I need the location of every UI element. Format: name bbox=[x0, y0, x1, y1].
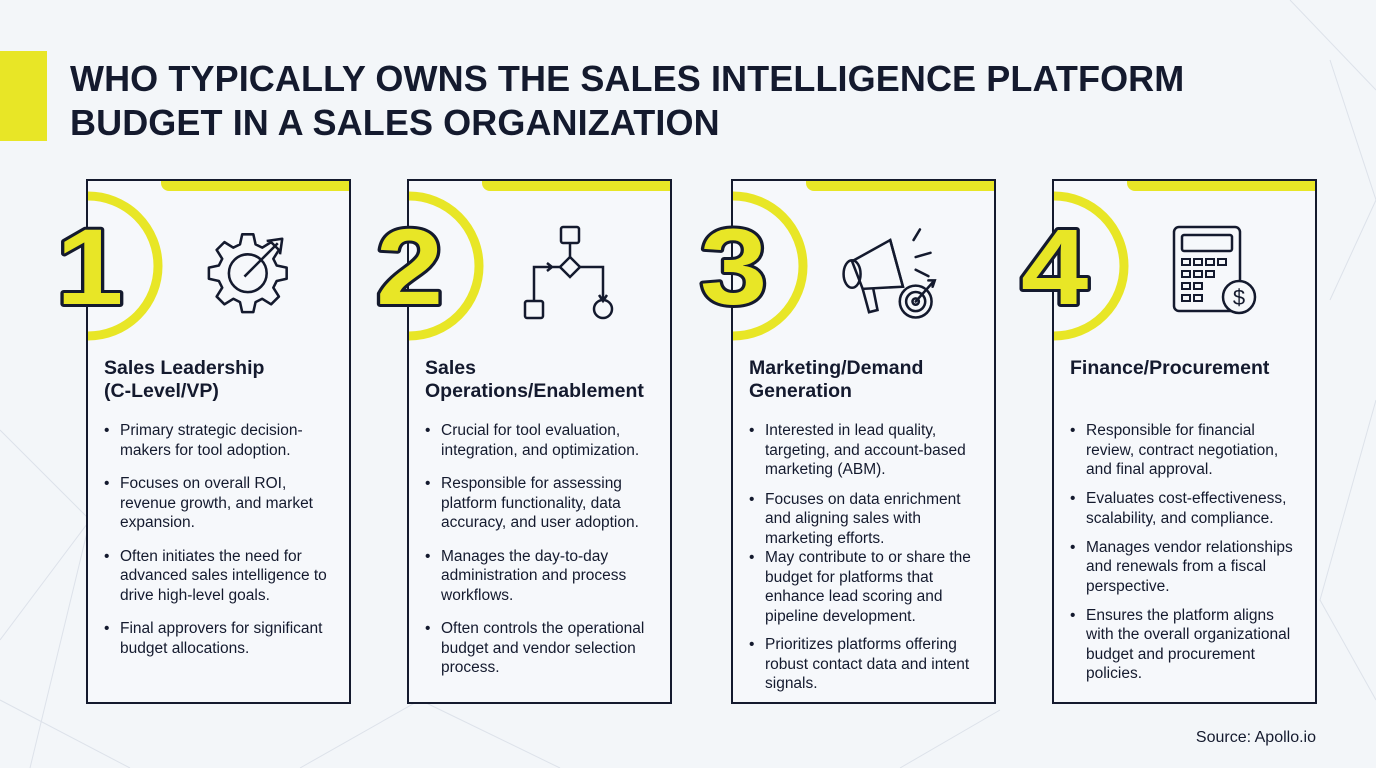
bullets: perspective. bbox=[1086, 578, 1170, 594]
bullets: Crucial for tool evaluation, integration, and optimization. bbox=[441, 422, 639, 458]
bullets bbox=[426, 422, 644, 676]
number 1 with arc bbox=[56, 192, 162, 340]
panel: card 4 finance bbox=[1052, 179, 1317, 704]
bullets: May contribute to or share the budget for platforms that enhance lead scoring and pipeline development. bbox=[765, 549, 971, 624]
heading: Operations/Enablement bbox=[425, 380, 644, 402]
title: WHO TYPICALLY OWNS THE SALES INTELLIGENCE PLATFORM bbox=[70, 58, 1184, 99]
panel: card 1 sales leadership bbox=[86, 179, 351, 704]
bullets: policies. bbox=[1086, 665, 1142, 682]
title bbox=[70, 58, 1184, 143]
bullets bbox=[750, 422, 971, 692]
number 2 with arc bbox=[376, 192, 484, 340]
bullets: review, contract negotiation, bbox=[1086, 442, 1278, 458]
icon: megaphone with target bbox=[842, 228, 936, 319]
panel: card 2 sales operations bbox=[407, 179, 672, 704]
icon: gear with arrow bbox=[208, 233, 288, 314]
icon: calculator with dollar bbox=[1172, 226, 1256, 314]
bullets: and final approval. bbox=[1086, 461, 1213, 478]
heading: Marketing/Demand bbox=[749, 357, 923, 379]
icon: flowchart bbox=[524, 226, 614, 320]
bullets: Responsible for financial bbox=[1086, 422, 1255, 439]
bullets bbox=[1070, 422, 1293, 682]
panel: card 3 marketing bbox=[731, 179, 996, 704]
number 1 with arc: 1 bbox=[56, 207, 123, 328]
bullets: Manages vendor relationships bbox=[1086, 538, 1293, 556]
bullets: Responsible for assessing platform functionality, data accuracy, and user adoption. bbox=[441, 475, 639, 531]
title accent bar bbox=[0, 51, 47, 141]
bullets bbox=[104, 422, 327, 656]
bullets: Manages the day-to-day administration and process workflows. bbox=[441, 548, 626, 604]
number 4 with arc: 4 bbox=[1021, 207, 1088, 328]
title: BUDGET IN A SALES ORGANIZATION bbox=[70, 102, 720, 143]
heading: Finance/Procurement bbox=[1070, 357, 1269, 379]
bullets: Evaluates cost-effectiveness, bbox=[1086, 490, 1286, 507]
bullets: Ensures the platform aligns bbox=[1086, 606, 1274, 624]
heading: Generation bbox=[749, 380, 852, 402]
bullets: Final approvers for significant budget allocations. bbox=[120, 620, 322, 656]
bullets: Often initiates the need for advanced sales intelligence to drive high-level goals. bbox=[120, 548, 327, 604]
bullets: budget and procurement bbox=[1086, 646, 1255, 662]
heading: Sales bbox=[425, 357, 476, 379]
heading: (C-Level/VP) bbox=[104, 380, 219, 402]
icon: calculator with dollar: $ bbox=[1233, 285, 1245, 310]
bullets: and renewals from a fiscal bbox=[1086, 558, 1266, 575]
heading bbox=[749, 357, 923, 402]
bullets: Primary strategic decision-makers for tool adoption. bbox=[120, 422, 303, 458]
heading bbox=[425, 357, 644, 402]
bullets: Interested in lead quality, targeting, and account-based marketing (ABM). bbox=[765, 422, 966, 478]
bullets: with the overall organizational bbox=[1086, 626, 1290, 643]
bullets: Prioritizes platforms offering robust contact data and intent signals. bbox=[765, 636, 969, 692]
bullets: Focuses on data enrichment and aligning sales with marketing efforts. bbox=[765, 490, 961, 546]
number 3 with arc bbox=[699, 192, 808, 340]
heading bbox=[104, 357, 264, 402]
number 4 with arc bbox=[1019, 192, 1128, 340]
number 3 with arc: 3 bbox=[700, 207, 767, 328]
heading: Sales Leadership bbox=[104, 357, 264, 379]
bullets: Focuses on overall ROI, revenue growth, and market expansion. bbox=[120, 475, 313, 531]
bullets: Often controls the operational budget and vendor selection process. bbox=[441, 620, 644, 676]
bullets: scalability, and compliance. bbox=[1086, 510, 1274, 526]
source note: Source: Apollo.io bbox=[1196, 729, 1316, 746]
number 2 with arc: 2 bbox=[376, 207, 443, 328]
